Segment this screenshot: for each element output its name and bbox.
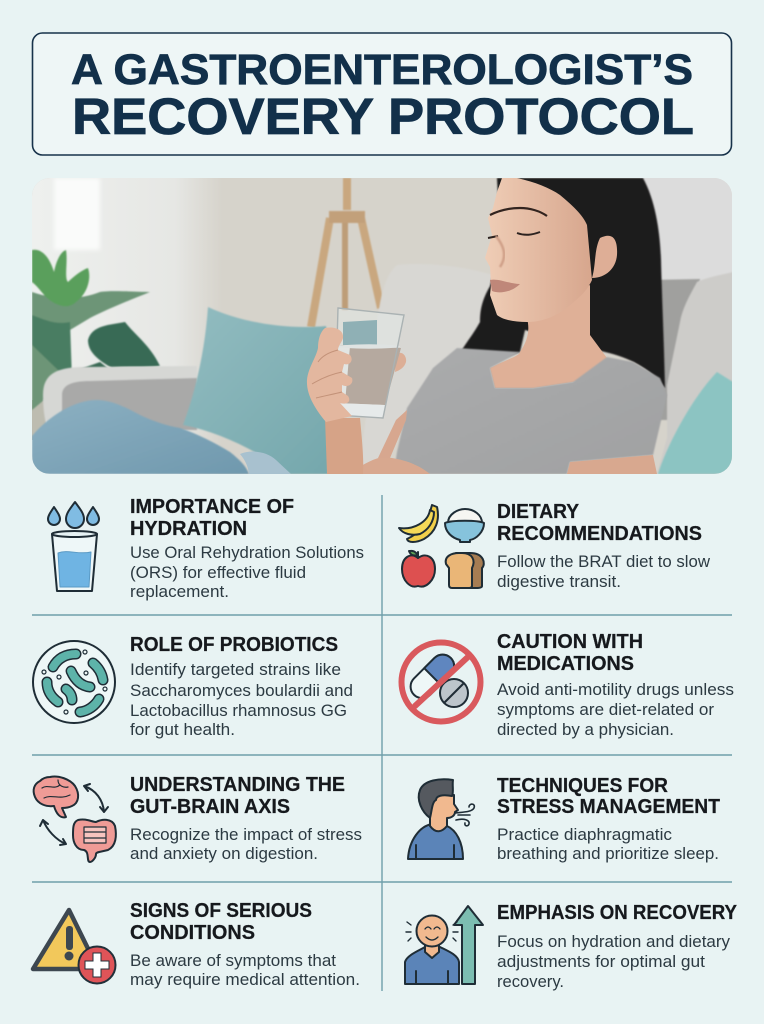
- title line 2: RECOVERY PROTOCOL: [72, 88, 694, 145]
- body text: Be aware of symptoms that: [130, 952, 336, 970]
- panel: probiotics: [33, 634, 353, 739]
- plant: [32, 250, 160, 410]
- body text line 2: digestive transit.: [497, 573, 621, 591]
- face: [485, 178, 592, 322]
- floor lamp: [311, 178, 381, 327]
- icon: smiling person and up arrow: [405, 906, 483, 984]
- heading line 2: GUT-BRAIN AXIS: [130, 796, 290, 818]
- heading: TECHNIQUES FOR: [497, 775, 669, 797]
- thumb behind glass: [395, 353, 406, 372]
- icon: apple: [402, 551, 435, 587]
- panel: medications: [402, 631, 734, 739]
- heading: ROLE OF PROBIOTICS: [130, 634, 338, 656]
- heading line 2: STRESS MANAGEMENT: [497, 796, 720, 818]
- heading: SIGNS OF SERIOUS: [130, 900, 312, 922]
- body text line 3: replacement.: [130, 583, 229, 601]
- icon: no pills: [402, 642, 480, 722]
- icon: toast: [446, 553, 484, 588]
- panel: stress management: [408, 775, 720, 863]
- icon: person breathing out: [408, 779, 474, 859]
- right teal pillow: [658, 372, 733, 474]
- heading: IMPORTANCE OF: [130, 496, 294, 518]
- icon: rice bowl: [445, 509, 484, 542]
- body text line 3: directed by a physician.: [497, 721, 674, 739]
- heading: UNDERSTANDING THE: [130, 774, 345, 796]
- icon: brain, gut and arrows: [34, 776, 116, 862]
- icon: intestine: [73, 819, 116, 862]
- body text line 2: symptoms are diet-related or: [497, 701, 715, 719]
- body text: Avoid anti-motility drugs unless: [497, 681, 734, 699]
- panel: gut-brain axis: [34, 774, 362, 863]
- heading line 2: CONDITIONS: [130, 922, 255, 944]
- icon: bacteria in petri dish: [33, 641, 115, 723]
- heading: DIETARY: [497, 501, 580, 523]
- sofa arm: [43, 366, 197, 430]
- body text line 2: and anxiety on digestion.: [130, 845, 318, 863]
- body text line 4: for gut health.: [130, 721, 235, 739]
- glass of water: [335, 308, 404, 418]
- icon: brain: [34, 776, 78, 817]
- panel: recovery: [405, 902, 738, 991]
- body text: Identify targeted strains like: [130, 661, 341, 679]
- shirt: [395, 348, 667, 474]
- body text: Recognize the impact of stress: [130, 826, 362, 844]
- body text line 3: recovery.: [497, 973, 564, 991]
- closed eye right: [517, 232, 540, 235]
- body text: Focus on hydration and dietary: [497, 933, 731, 951]
- icon: banana: [399, 505, 438, 542]
- lips: [490, 280, 520, 292]
- dividers: [32, 495, 732, 991]
- panel: serious conditions: [33, 900, 360, 989]
- blanket: [32, 400, 249, 474]
- body text line 2: Saccharomyces boulardii and: [130, 682, 353, 700]
- heading line 2: RECOMMENDATIONS: [497, 523, 702, 545]
- body text: Follow the BRAT diet to slow: [497, 553, 710, 571]
- sofa back cushion: [378, 292, 386, 310]
- heading: CAUTION WITH: [497, 631, 643, 653]
- lower arm: [363, 458, 430, 474]
- body text line 2: adjustments for optimal gut: [497, 953, 705, 971]
- body text: Use Oral Rehydration Solutions: [130, 544, 364, 562]
- eyebrow: [490, 208, 547, 216]
- neck: [490, 285, 607, 388]
- left arm: [378, 410, 407, 458]
- teal pillow: [183, 306, 327, 474]
- icon: arrows: [40, 784, 108, 845]
- hand: [307, 327, 352, 422]
- ear: [592, 236, 617, 278]
- title box: [32, 33, 732, 155]
- woman: [325, 178, 667, 474]
- body text: Practice diaphragmatic: [497, 826, 672, 844]
- body text line 2: may require medical attention.: [130, 971, 360, 989]
- hair: [457, 178, 665, 388]
- panel: hydration: [48, 496, 364, 601]
- heading line 2: HYDRATION: [130, 518, 247, 540]
- right sofa cushions: [660, 278, 700, 420]
- photo: woman resting on sofa drinking water: [32, 178, 733, 474]
- right arm: [567, 455, 657, 474]
- heading line 2: MEDICATIONS: [497, 653, 634, 675]
- nose shadow: [496, 236, 504, 267]
- blanket fold: [240, 452, 291, 474]
- closed eye left: [488, 236, 498, 238]
- icon: water drops and glass: [48, 502, 99, 591]
- body text line 3: Lactobacillus rhamnosus GG: [130, 702, 347, 720]
- heading: EMPHASIS ON RECOVERY: [497, 902, 738, 924]
- title line 1: A GASTROENTEROLOGIST’S: [71, 46, 693, 94]
- icon: warning triangle with medical cross: [33, 910, 116, 984]
- body text line 2: breathing and prioritize sleep.: [497, 845, 719, 863]
- forearm: [325, 418, 363, 474]
- body text line 2: (ORS) for effective fluid: [130, 564, 306, 582]
- panel: dietary: [399, 501, 710, 591]
- icon: BRAT foods: [399, 505, 484, 588]
